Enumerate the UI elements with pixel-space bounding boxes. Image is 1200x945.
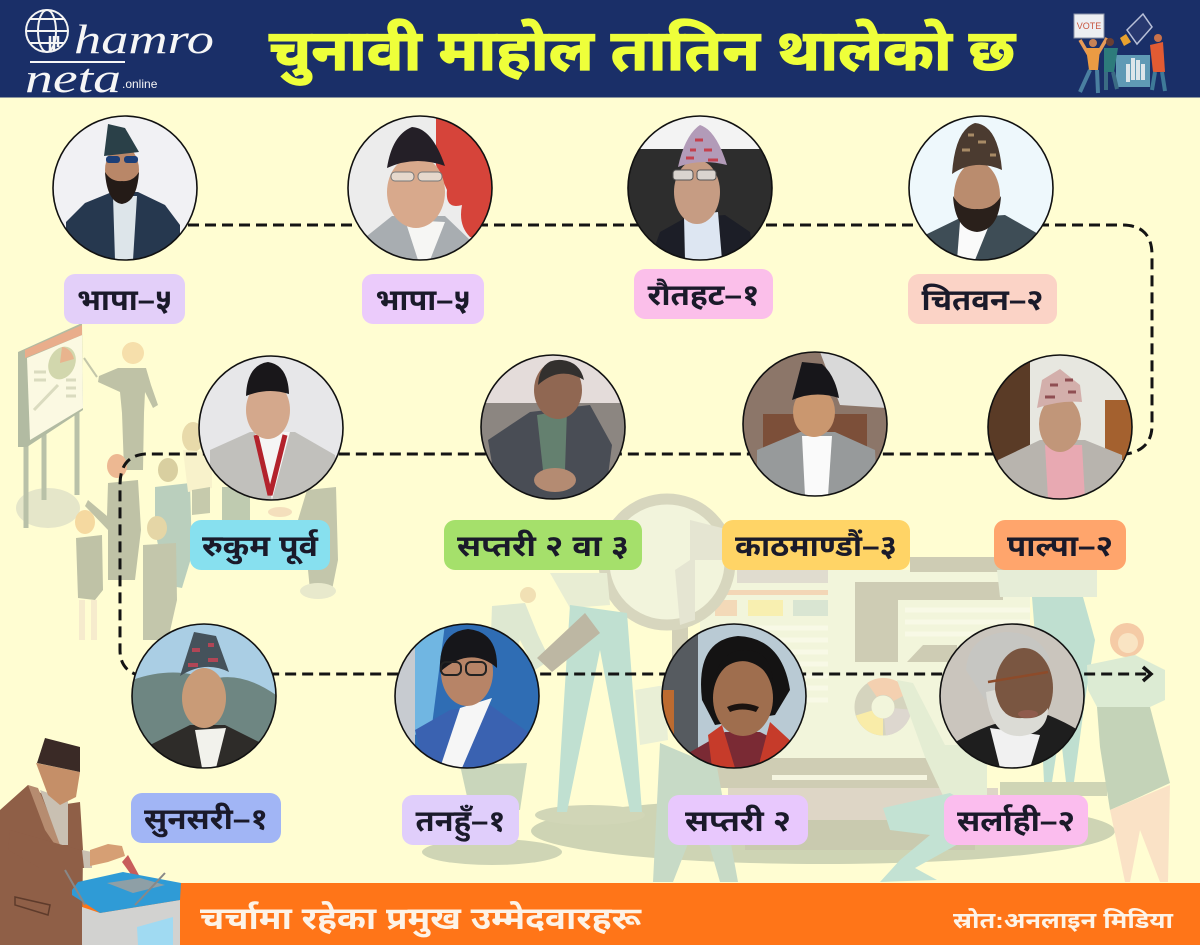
icon: voters with ballot box	[1074, 14, 1165, 93]
portrait 3	[628, 116, 772, 260]
district label	[668, 795, 808, 845]
portrait 12	[940, 624, 1084, 768]
district label	[190, 520, 330, 570]
logo rule	[30, 61, 125, 63]
candidate 12: Sarlahi-2	[940, 624, 1088, 845]
voter face and cap	[36, 763, 80, 805]
district label: पाल्पा–२	[1007, 530, 1113, 563]
magnifier	[672, 625, 688, 670]
district label: रौतहट–१	[648, 278, 760, 312]
candidate 7: Kathmandu-3	[722, 352, 910, 570]
portrait 1	[53, 116, 197, 260]
ballot paper	[122, 855, 140, 880]
illustration: voter at ballot box	[0, 738, 181, 945]
icon: voters with ballot box: VOTE	[1077, 21, 1101, 31]
district label: चितवन–२	[922, 283, 1044, 317]
portrait 5	[199, 356, 343, 500]
right-side seated person	[897, 680, 987, 800]
faded illustration: presenter and audience	[16, 323, 338, 640]
dashboard panels	[700, 570, 1030, 758]
cuff and hand	[82, 850, 92, 868]
voter coat	[0, 785, 83, 945]
candidate 10: Tanahun-1	[395, 624, 539, 845]
footer bar	[0, 883, 1200, 945]
faded illustration: analysts and dashboard	[422, 499, 1170, 882]
district label: सुनसरी–१	[144, 802, 268, 838]
portrait 4	[909, 116, 1053, 260]
district label	[994, 520, 1126, 570]
laptop base	[690, 758, 943, 788]
candidate 2: Jhapa-5	[348, 116, 492, 324]
logo	[25, 10, 214, 101]
logo wordmark hamro: hamro	[74, 16, 214, 62]
district label: रुकुम पूर्व	[202, 529, 319, 565]
logo wordmark neta: neta	[25, 55, 121, 101]
district label: तनहुँ–१	[416, 803, 506, 842]
candidate 4: Chitwan-2	[908, 116, 1057, 324]
logo domain suffix: .online	[122, 77, 158, 91]
district label: भापा–५	[77, 284, 172, 317]
seated figure and shirt	[635, 685, 668, 745]
district label	[908, 274, 1057, 324]
district label	[131, 793, 281, 843]
portrait 11	[662, 624, 806, 768]
district label	[362, 274, 484, 324]
portrait 8	[988, 355, 1132, 499]
district label: सप्तरी २ वा ३	[457, 529, 629, 563]
portrait 7	[743, 352, 887, 496]
candidate 9: Sunsari-1	[131, 624, 281, 843]
candidate 6: Saptari 2 or 3	[444, 355, 642, 570]
header bar	[0, 0, 1200, 101]
icon: globe	[26, 10, 68, 52]
district label	[402, 795, 519, 845]
district label	[64, 274, 185, 324]
district label: भापा–५	[376, 284, 470, 317]
title: चुनावी माहोल तातिन थालेको छ	[269, 18, 1017, 86]
candidate 3: Rautahat-1	[628, 116, 773, 319]
district label	[944, 795, 1088, 845]
donut chart	[863, 687, 903, 727]
portrait 2	[348, 116, 492, 260]
candidate 8: Palpa-2	[988, 355, 1132, 570]
district label	[444, 520, 642, 570]
portrait 10	[395, 624, 539, 768]
portrait 9	[132, 624, 276, 768]
candidate 11: Saptari 2	[662, 624, 808, 845]
tall person and clipboard	[550, 573, 610, 608]
district label	[634, 269, 773, 319]
woman on right	[1110, 623, 1144, 657]
district label: काठमाण्डौं–३	[735, 529, 897, 563]
small man	[520, 587, 536, 603]
footer caption: चर्चामा रहेका प्रमुख उम्मेदवारहरू	[200, 901, 642, 938]
district label: सर्लाही–२	[957, 804, 1075, 838]
candidate 5: Rukum East	[190, 356, 343, 570]
district label: सप्तरी २	[685, 804, 791, 838]
right standing person	[997, 570, 1097, 597]
district label	[722, 520, 910, 570]
portrait 6	[481, 355, 625, 499]
candidate 1: Jhapa-5	[53, 116, 197, 324]
dashed connector path with arrow	[120, 225, 1152, 681]
source credit: स्रोत:अनलाइन मिडिया	[953, 908, 1174, 933]
ballot box	[82, 900, 180, 945]
